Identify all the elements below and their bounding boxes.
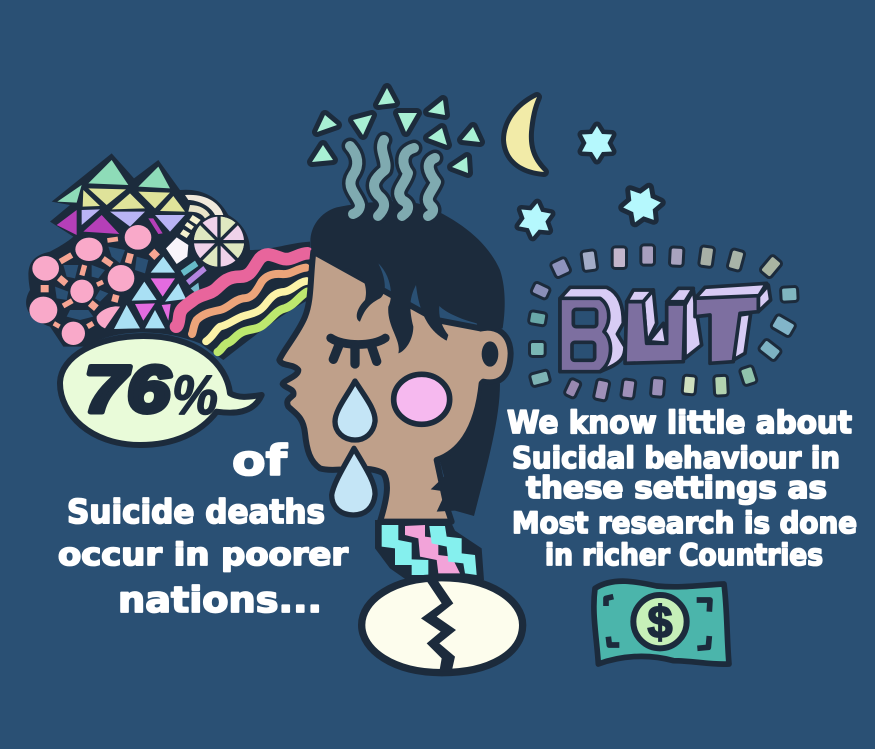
text block: we know little: We know little about <box>507 405 852 441</box>
dollar sign: $ <box>647 597 673 648</box>
scarf <box>375 520 484 580</box>
icon: dollar bill <box>594 581 729 664</box>
icon: scarf and cracked egg body <box>362 520 523 673</box>
wavy steam strands <box>350 140 436 216</box>
icon: crescent moon <box>506 97 544 172</box>
stat: 76% <box>84 352 218 426</box>
crack <box>421 580 456 672</box>
text block: we know little: these settings as <box>526 471 827 506</box>
title: BUT 3D lettering <box>560 283 771 372</box>
letter T <box>695 283 771 363</box>
back hair <box>431 383 500 516</box>
stat: 76%: 76 <box>84 352 172 426</box>
letter B <box>560 287 625 372</box>
text block: of suicide deaths: nations... <box>118 580 322 621</box>
letter U <box>625 288 702 363</box>
text block: we know little: Suicidal behaviour in <box>512 441 840 475</box>
falling triangles <box>312 88 480 173</box>
tear two <box>332 448 375 515</box>
egg <box>362 578 523 673</box>
cheek <box>394 374 450 424</box>
text block: of suicide deaths: occur in poorer <box>58 537 349 573</box>
icon: stars <box>518 126 664 239</box>
icon: geometric mind cluster with rainbow <box>26 153 315 445</box>
ear hole <box>482 341 498 367</box>
icon: head in profile <box>279 201 511 522</box>
text block: we know little: in richer Countries <box>545 538 823 572</box>
stat: 76%: % <box>172 363 218 426</box>
hair <box>310 201 505 353</box>
text block: of suicide deaths <box>58 436 349 621</box>
text block: we know little <box>507 405 857 572</box>
closed eye <box>331 338 385 364</box>
tear one <box>335 381 375 440</box>
speech bubble <box>60 336 262 445</box>
text block: we know little: Most research is done <box>512 506 857 540</box>
text block: of suicide deaths: of <box>232 436 288 485</box>
text block: of suicide deaths: Suicide deaths <box>67 492 325 531</box>
face <box>279 252 511 522</box>
icon: sun-ray dashes around BUT <box>530 246 797 400</box>
